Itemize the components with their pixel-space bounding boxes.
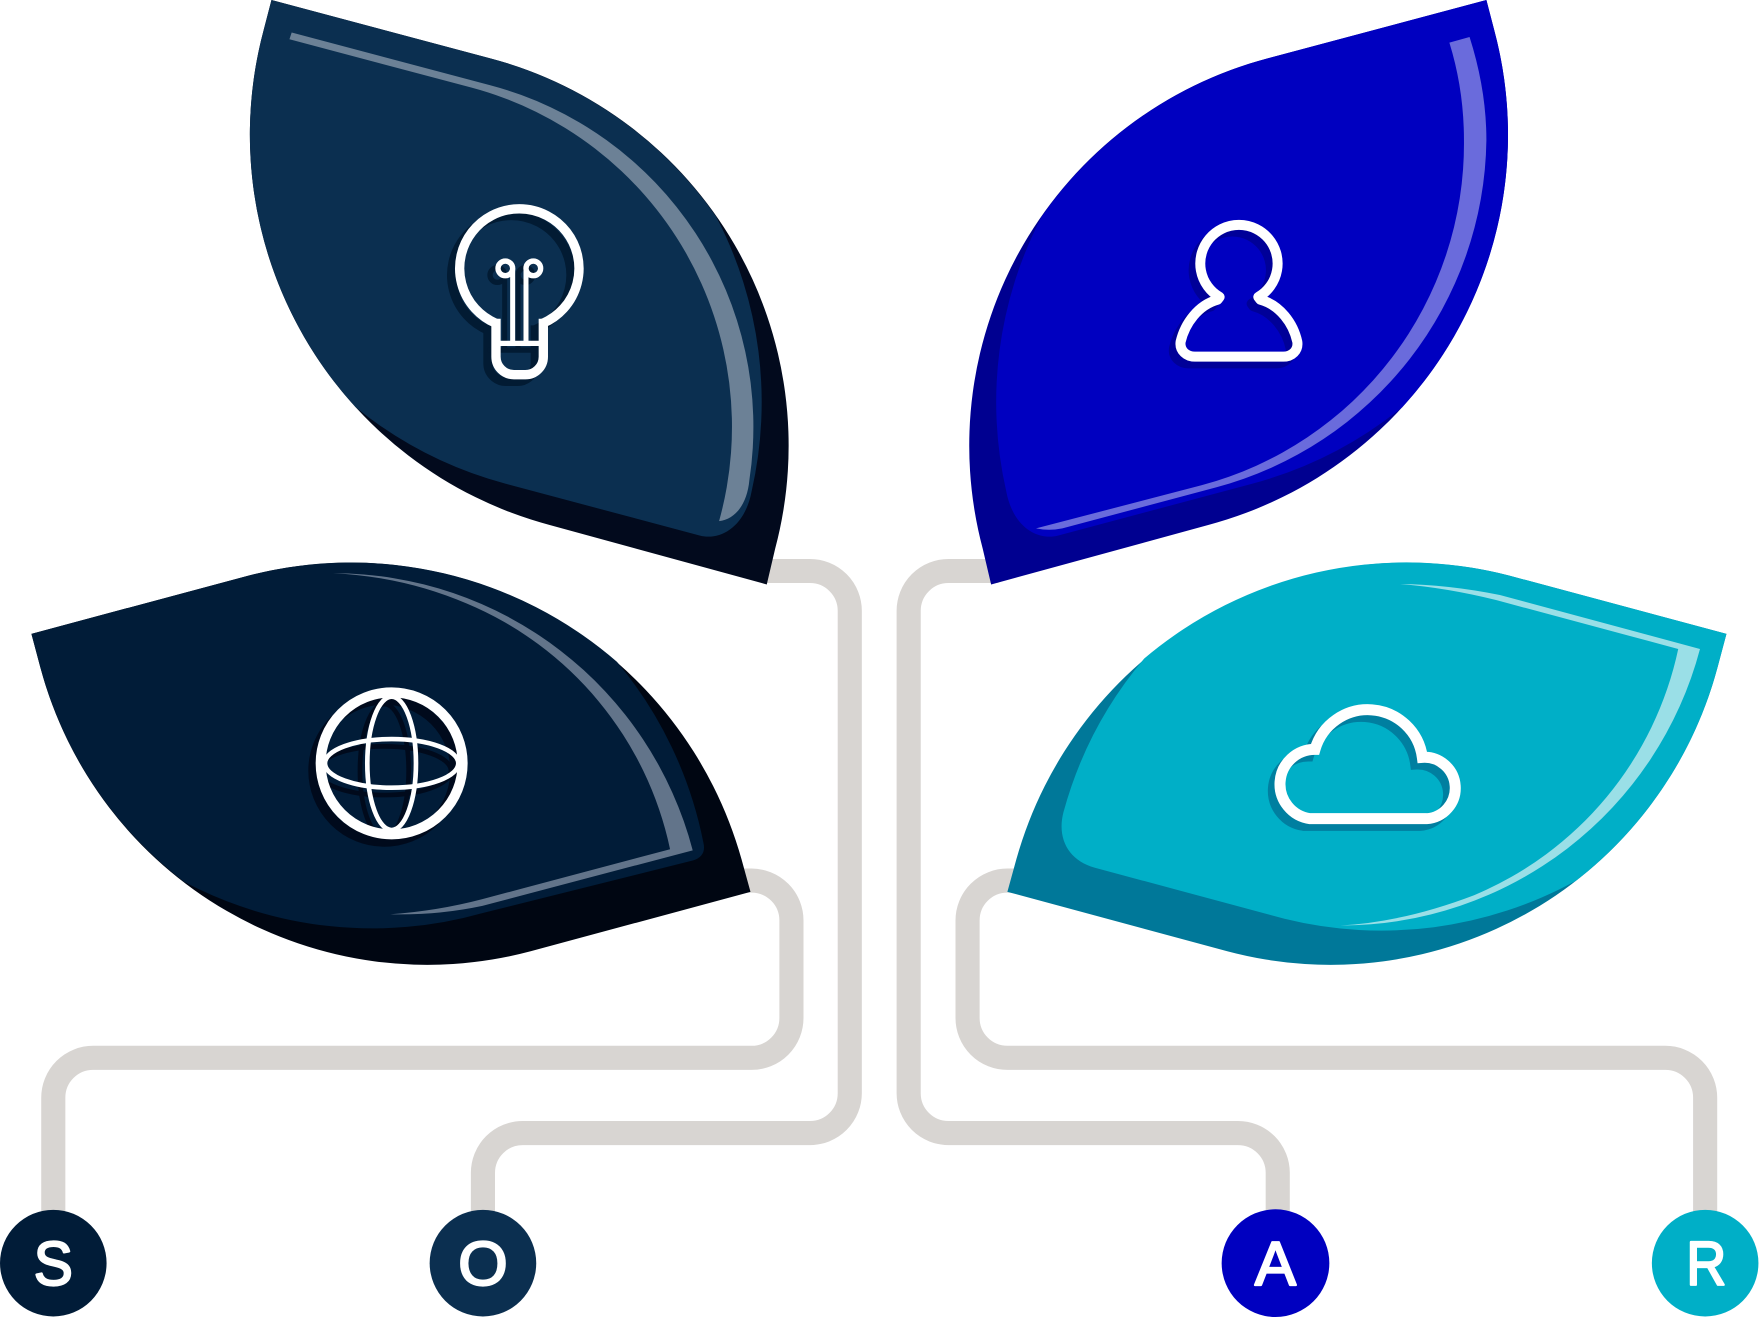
badge: R — [1652, 1210, 1758, 1316]
panel: top-left leaf (light bulb) — [250, 0, 789, 584]
connector line: R — [968, 881, 1705, 1223]
badge: O: O — [458, 1230, 508, 1299]
leaf face — [31, 563, 704, 928]
badge: S: S — [34, 1230, 73, 1298]
leaf highlight — [333, 573, 693, 914]
panel: bottom-left leaf (globe) — [31, 563, 750, 965]
leaf highlight — [289, 33, 753, 521]
icon: cloud — [1273, 710, 1455, 825]
badge: R: R — [1686, 1230, 1726, 1299]
connector line: A — [909, 571, 1278, 1223]
leaf highlight — [1036, 37, 1486, 530]
badge: A — [1222, 1209, 1329, 1317]
badge: O — [430, 1210, 536, 1316]
leaf highlight — [1341, 584, 1700, 925]
badge: S — [0, 1210, 107, 1316]
leaf shadow body — [1007, 563, 1726, 965]
connector line: S — [53, 881, 791, 1223]
icon: person — [1174, 225, 1297, 363]
badge: A: A — [1255, 1230, 1297, 1299]
leaf shadow body — [250, 0, 789, 584]
icon: light bulb — [452, 209, 579, 381]
leaf shadow body — [969, 0, 1508, 584]
panel: top-right leaf (person) — [969, 0, 1508, 584]
leaf shadow body — [31, 563, 750, 965]
leaf face — [1062, 562, 1726, 931]
leaf face — [250, 0, 762, 537]
connector line: O — [483, 571, 850, 1223]
icon: globe — [313, 692, 463, 842]
leaf face — [996, 0, 1508, 537]
panel: bottom-right leaf (cloud) — [1007, 562, 1726, 965]
